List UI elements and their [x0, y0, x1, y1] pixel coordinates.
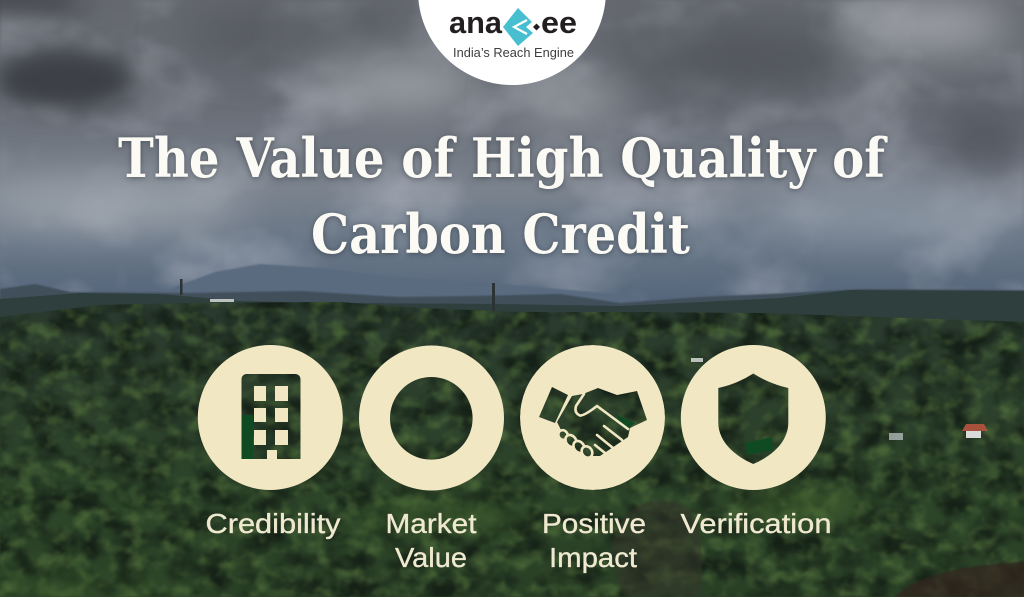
title line 1: The Value of High Quality of — [118, 126, 888, 190]
transmission towers — [180, 279, 495, 311]
logo mark — [503, 8, 533, 46]
logo dot — [533, 24, 540, 30]
label: positive impact — [542, 508, 646, 573]
icon: verification shield — [681, 345, 826, 490]
label: credibility: Credibility — [206, 508, 340, 539]
icon: positive impact handshake — [520, 345, 665, 490]
label: market value — [386, 508, 477, 573]
rock — [613, 501, 702, 597]
bare ground — [895, 562, 1024, 597]
labels — [206, 508, 832, 573]
title — [118, 126, 888, 266]
icon: market value ring — [359, 346, 504, 490]
background photo: forest — [0, 295, 1024, 597]
houses — [962, 424, 988, 431]
hilltop buildings — [210, 299, 234, 302]
label: market value: Market — [386, 508, 477, 539]
background photo: distant hills — [0, 264, 1024, 345]
title line 2: Carbon Credit — [311, 202, 690, 266]
icon: credibility building — [198, 345, 343, 490]
logo wordmark right: ee — [541, 5, 577, 40]
label: positive impact: Impact — [549, 542, 637, 573]
logo wordmark left: ana — [449, 5, 503, 40]
label: verification: Verification — [680, 508, 832, 539]
logo badge — [418, 0, 606, 85]
label: positive impact: Positive — [542, 508, 646, 539]
label: market value: Value — [395, 542, 467, 573]
background photo: cloudy sky — [0, 0, 1024, 305]
logo tagline: India’s Reach Engine — [453, 46, 574, 60]
